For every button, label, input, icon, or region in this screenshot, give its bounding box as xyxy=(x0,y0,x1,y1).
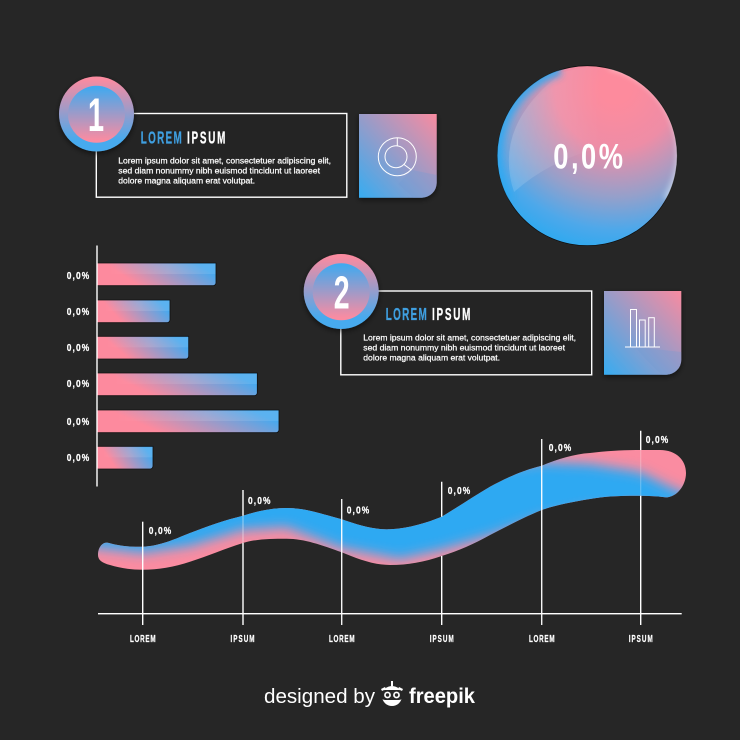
heading 1: IPSUM xyxy=(187,128,227,148)
bar 4: 0,0% xyxy=(67,378,90,390)
column 5: LOREM xyxy=(529,632,555,644)
heading 2 xyxy=(386,305,472,325)
column 6: IPSUM xyxy=(629,632,654,644)
column 3: 0,0% xyxy=(347,505,370,517)
text box 2 xyxy=(341,291,592,375)
heading 2: IPSUM xyxy=(432,305,472,325)
bar 6 xyxy=(67,446,153,469)
bar 5: 0,0% xyxy=(67,416,90,428)
body text 1: Lorem ipsum dolor sit amet, consectetuer adipiscing elit, xyxy=(118,156,331,166)
panel: horizontal bar chart xyxy=(67,246,279,486)
bar 4 xyxy=(67,373,257,396)
heading 2: LOREM xyxy=(386,305,428,325)
footer credit: designed by xyxy=(264,685,376,708)
number badge 2 xyxy=(304,254,379,329)
panel: info block 2 xyxy=(304,254,681,375)
body text 2 xyxy=(363,332,576,362)
bar 3 xyxy=(67,336,189,359)
bar chart axis xyxy=(96,246,98,486)
bar 3: 0,0% xyxy=(67,342,90,354)
column 3: LOREM xyxy=(329,632,355,644)
bar 6: 0,0% xyxy=(67,452,90,464)
column 1: LOREM xyxy=(130,632,156,644)
body text 2: dolore magna aliquam erat volutpat. xyxy=(363,352,500,362)
bar 5 xyxy=(67,410,279,433)
column 4: 0,0% xyxy=(448,485,471,497)
column 6: 0,0% xyxy=(646,434,669,446)
icon tile: bar chart xyxy=(604,291,681,375)
percentage value: 0,0% xyxy=(553,137,625,176)
number badge 2: 2 xyxy=(334,267,350,319)
footer credit: freepik xyxy=(409,685,475,708)
column 2: IPSUM xyxy=(230,632,256,644)
body text 2: sed diam nonummy nibh euismod tincidunt ut laoreet xyxy=(363,342,566,352)
column 2: 0,0% xyxy=(248,495,272,507)
column 5 xyxy=(529,439,572,644)
column 2 xyxy=(230,490,272,644)
body text 1: sed diam nonummy nibh euismod tincidunt ut laoreet xyxy=(118,166,321,176)
panel: wave area chart xyxy=(80,431,700,644)
body text 1 xyxy=(118,156,331,186)
wave band xyxy=(98,450,686,570)
heading 1 xyxy=(141,128,227,148)
heading 1: LOREM xyxy=(141,128,183,148)
number badge 1 xyxy=(59,76,134,152)
footer credit xyxy=(264,681,475,708)
column 1: 0,0% xyxy=(149,525,172,537)
chart baseline xyxy=(98,613,682,614)
column 1 xyxy=(130,522,172,644)
panel: info block 1 xyxy=(59,76,437,198)
bar 2: 0,0% xyxy=(67,306,90,318)
body text 1: dolore magna aliquam erat volutpat. xyxy=(118,176,255,186)
column 5: 0,0% xyxy=(549,442,572,454)
icon tile: donut chart xyxy=(359,114,437,198)
icon: freepik mascot xyxy=(380,681,404,706)
body text 2: Lorem ipsum dolor sit amet, consectetuer adipiscing elit, xyxy=(363,332,576,342)
number badge 1: 1 xyxy=(88,90,104,142)
bar 1: 0,0% xyxy=(67,270,90,282)
column 4: IPSUM xyxy=(430,632,455,644)
text box 1 xyxy=(96,114,347,197)
column 6 xyxy=(629,431,669,644)
panel: big percentage circle xyxy=(497,64,682,246)
bar 2 xyxy=(67,300,170,323)
column 4 xyxy=(430,482,471,644)
bar 1 xyxy=(67,263,216,286)
column 3 xyxy=(329,499,370,644)
